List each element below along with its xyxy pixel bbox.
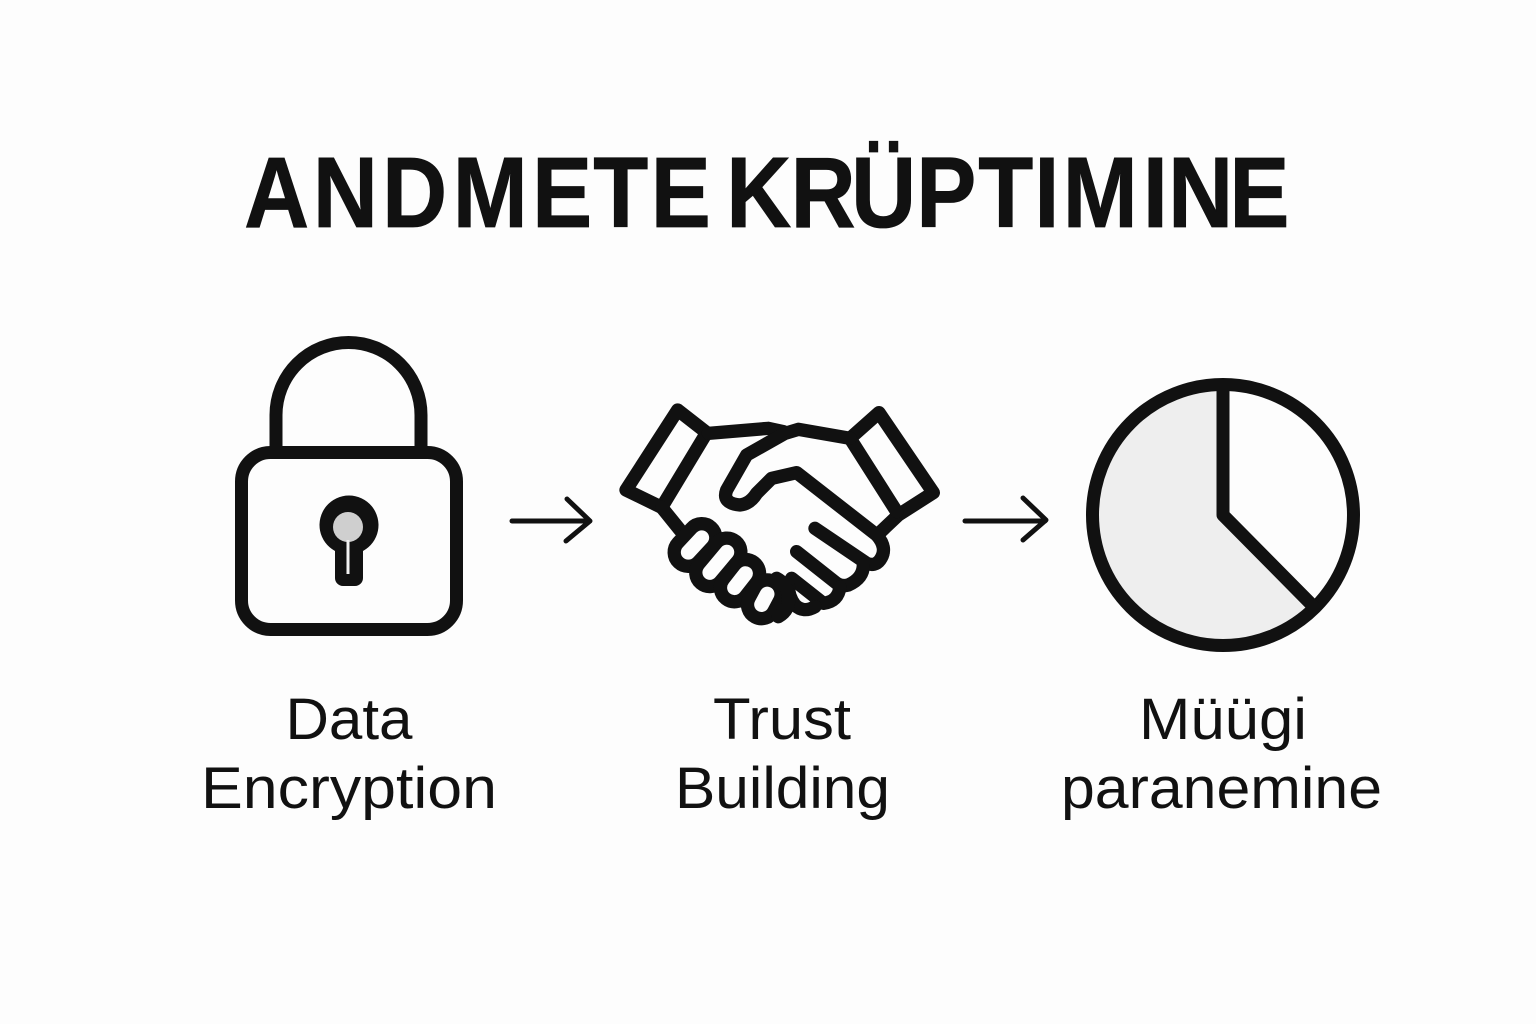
pie chart large slice bbox=[1093, 385, 1313, 645]
label: data encryption: Data bbox=[286, 687, 413, 752]
label: data encryption bbox=[201, 687, 497, 821]
label: sales improvement bbox=[1061, 687, 1382, 821]
label: trust building bbox=[675, 687, 890, 821]
padlock keyhole bbox=[320, 496, 379, 586]
icon: pie chart bbox=[1092, 384, 1354, 646]
label: trust building: Trust bbox=[713, 687, 851, 752]
icon: handshake bbox=[626, 410, 933, 624]
left hand fingers bbox=[668, 518, 786, 624]
label: trust building: Building bbox=[675, 756, 890, 821]
left arm bbox=[708, 428, 783, 433]
padlock body bbox=[242, 452, 456, 630]
arrow: trust building to sales bbox=[965, 498, 1046, 540]
label: sales improvement: paranemine bbox=[1061, 756, 1382, 821]
right cuff bbox=[850, 413, 933, 534]
arrow: data encryption to trust building bbox=[512, 499, 590, 541]
label: data encryption: Encryption bbox=[201, 756, 497, 821]
pie chart outline and dividers bbox=[1092, 384, 1354, 646]
padlock shackle bbox=[276, 342, 421, 450]
right hand fingers bbox=[797, 552, 863, 586]
title: ANDMETE KRÜPTIMINE bbox=[244, 138, 1289, 249]
label: sales improvement: Müügi bbox=[1139, 687, 1307, 752]
left cuff bbox=[626, 410, 707, 507]
icon: padlock bbox=[242, 342, 456, 630]
right hand with thumb bbox=[726, 429, 883, 564]
